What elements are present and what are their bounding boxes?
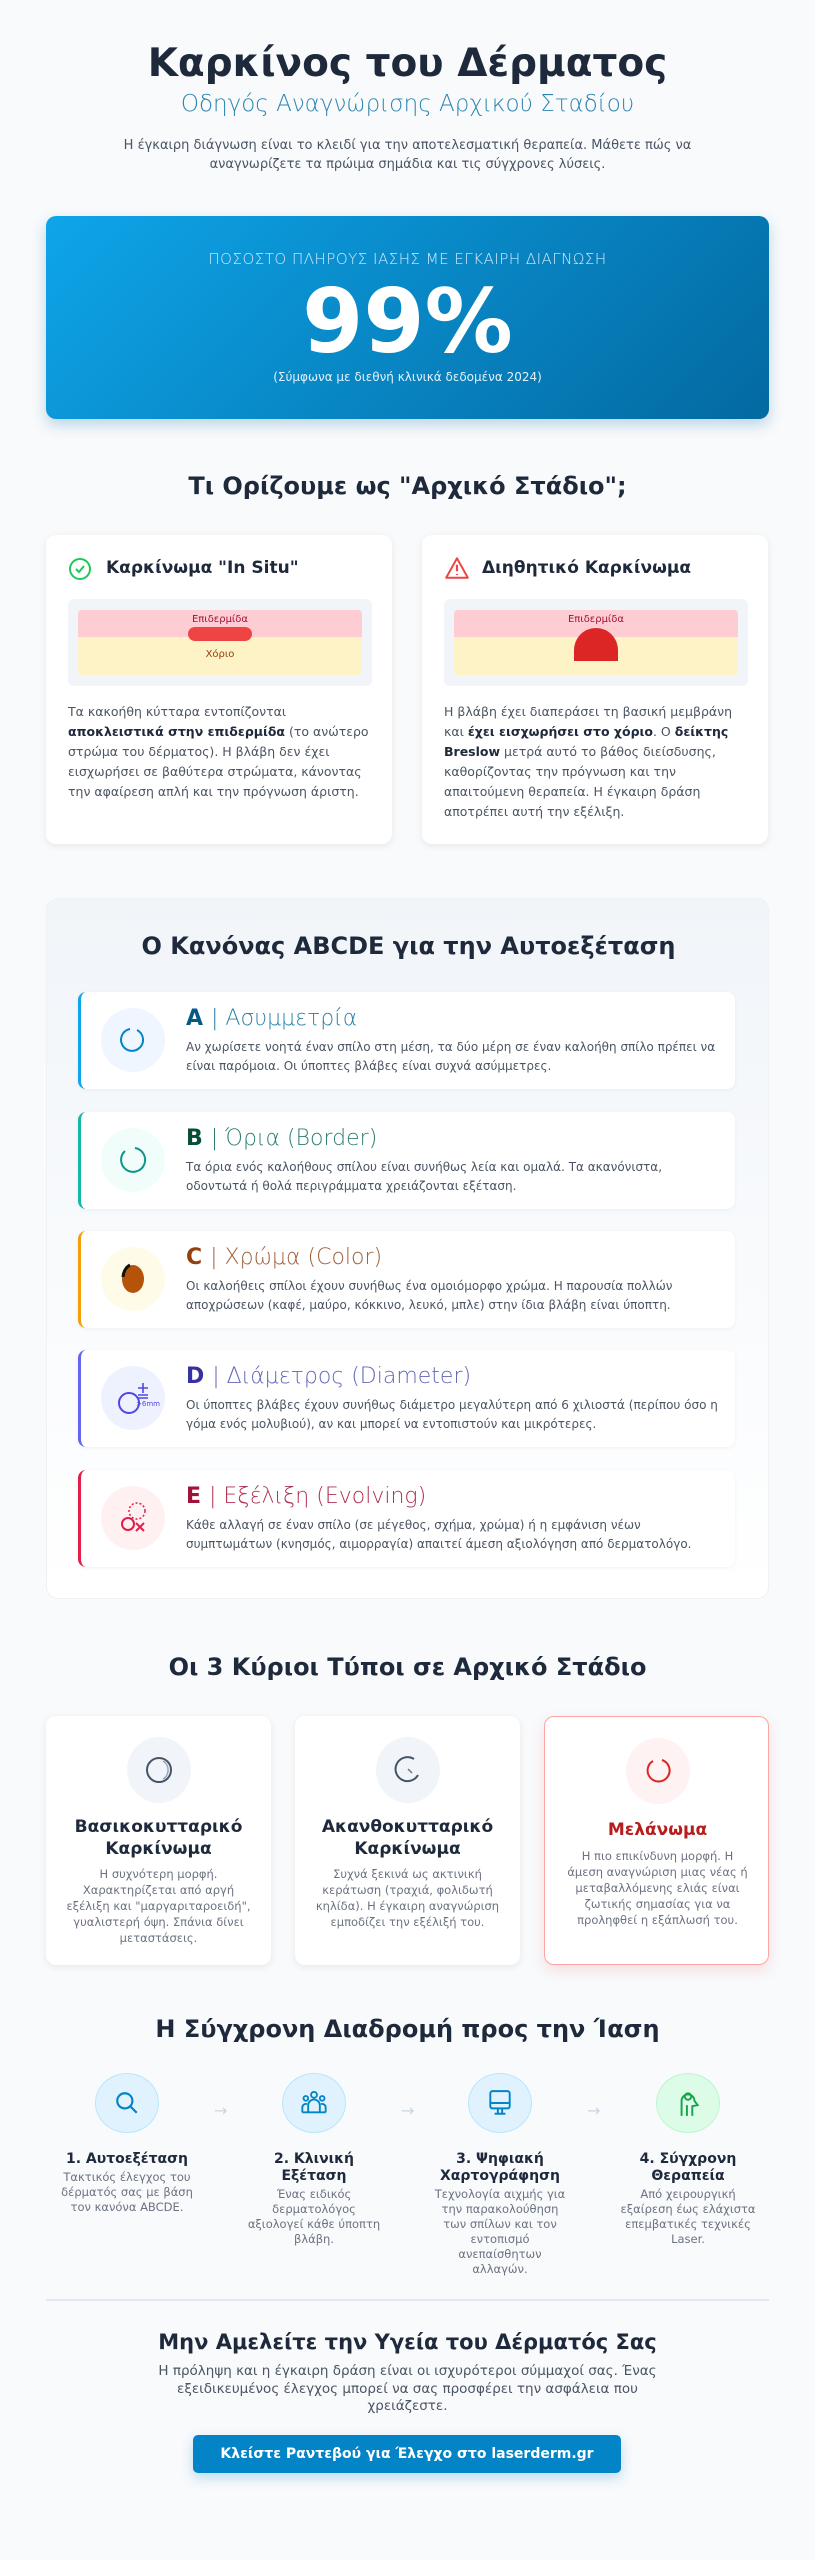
item C: Οι καλοήθεις σπίλοι έχουν συνήθως ένα ομοιόμορφο χρώμα. Η παρουσία πολλών αποχρώσεων (καφέ, μαύρο, κόκκινο, λευκό, μπλε) στην ίδια βλάβη είναι ύποπτη. bbox=[186, 1279, 672, 1312]
item D: Οι ύποπτες βλάβες έχουν συνήθως διάμετρο μεγαλύτερη από 6 χιλιοστά (περίπου όσο η γόμα ενός μολυβιού), αν και μπορεί να εντοπιστούν και μικρότερες. bbox=[186, 1398, 718, 1431]
step 2: Ένας ειδικός δερματολόγος αξιολογεί κάθε ύποπτη βλάβη. bbox=[248, 2187, 380, 2246]
item C: C | Χρώμα (Color) bbox=[186, 1245, 382, 1270]
item A: Αν χωρίσετε νοητά έναν σπίλο στη μέση, τα δύο μέρη σε έναν καλοήθη σπίλο πρέπει να είναι παρόμοια. Οι ύποπτες βλάβες είναι συχνά ασύμμετρες. bbox=[186, 1040, 715, 1073]
item B: B | Όρια (Border) bbox=[186, 1126, 377, 1151]
diagram: in situ: Επιδερμίδα bbox=[192, 614, 248, 625]
step 3: Τεχνολογία αιχμής για την παρακολούθηση των σπίλων και τον εντοπισμό ανεπαίσθητων αλλαγών. bbox=[435, 2187, 565, 2276]
item D: D | Διάμετρος (Diameter) bbox=[186, 1364, 471, 1389]
item E: Κάθε αλλαγή σε έναν σπίλο (σε μέγεθος, σχήμα, χρώμα) ή η εμφάνιση νέων συμπτωμάτων (κνησμός, αιμορραγία) απαιτεί άμεση αξιολόγηση από δερματολόγο. bbox=[186, 1518, 691, 1551]
icon D: >6mm bbox=[136, 1400, 160, 1408]
icon: monitor bbox=[468, 2073, 532, 2133]
card: basal cell: Η συχνότερη μορφή. Χαρακτηρίζεται από αργή εξέλιξη και "μαργαριταροειδή", γυαλιστερή όψη. Σπάνια δίνει μεταστάσεις. bbox=[66, 1867, 251, 1945]
step 4: 4. Σύγχρονη Θεραπεία bbox=[640, 2151, 736, 2184]
card: squamous bbox=[295, 1716, 520, 1965]
card text: Τα κακοήθη κύτταρα εντοπίζονται αποκλειστικά στην επιδερμίδα (το ανώτερο στρώμα του δέρματος). Η βλάβη δεν έχει εισχωρήσει σε βαθύτερα στρώματα, κάνοντας την αφαίρεση απλή και την πρόγνωση άριστη. bbox=[68, 704, 369, 799]
icon E bbox=[101, 1486, 165, 1550]
icon D bbox=[101, 1366, 165, 1430]
title: Καρκίνος του Δέρματος bbox=[148, 41, 667, 86]
intro text: Η έγκαιρη διάγνωση είναι το κλειδί για την αποτελεσματική θεραπεία. Μάθετε πώς να αναγνωρίζετε τα πρώιμα σημάδια και τις σύγχρονες λύσεις. bbox=[124, 138, 691, 172]
icon: melanoma bbox=[626, 1738, 690, 1804]
subtitle: Οδηγός Αναγνώρισης Αρχικού Σταδίου bbox=[181, 91, 634, 117]
step 2 bbox=[248, 2073, 380, 2246]
step 1: Τακτικός έλεγχος του δέρματός σας με βάση τον κανόνα ABCDE. bbox=[61, 2170, 193, 2214]
heading: 3 types: Οι 3 Κύριοι Τύποι σε Αρχικό Στάδιο bbox=[169, 1653, 646, 1681]
diagram: invasive bbox=[444, 599, 748, 686]
item E bbox=[78, 1470, 735, 1567]
arrow: → bbox=[401, 2101, 414, 2120]
CTA button bbox=[193, 2435, 621, 2473]
card: melanoma bbox=[544, 1716, 769, 1965]
card: melanoma: Η πιο επικίνδυνη μορφή. Η άμεση αναγνώριση μιας νέας ή μεταβαλλόμενης ελιάς είναι ζωτικής σημασίας για να προληφθεί η εξάπλωσή του. bbox=[567, 1849, 748, 1927]
card title: Διηθητικό Καρκίνωμα bbox=[482, 558, 691, 578]
diagram: in situ bbox=[68, 599, 372, 686]
diagram: in situ: Χόριο bbox=[206, 649, 234, 660]
item D bbox=[78, 1350, 735, 1447]
item C bbox=[78, 1231, 735, 1328]
item B bbox=[78, 1112, 735, 1209]
step 1: 1. Αυτοεξέταση bbox=[66, 2151, 188, 2167]
CTA button: Κλείστε Ραντεβού για Έλεγχο στο laserderm.gr bbox=[220, 2446, 594, 2462]
step 4: Από χειρουργική εξαίρεση έως ελάχιστα επεμβατικές τεχνικές Laser. bbox=[620, 2187, 756, 2246]
icon: search bbox=[95, 2073, 159, 2133]
icon: basal bbox=[127, 1737, 191, 1803]
step 2: 2. Κλινική Εξέταση bbox=[274, 2151, 354, 2184]
card: squamous: Συχνά ξεκινά ως ακτινική κεράτωση (τραχιά, φολιδωτή κηλίδα). Η έγκαιρη αναγνώριση εμποδίζει την εξέλιξή του. bbox=[316, 1867, 499, 1929]
item A: A | Ασυμμετρία bbox=[186, 1006, 357, 1031]
item A bbox=[78, 992, 735, 1089]
item E: E | Εξέλιξη (Evolving) bbox=[186, 1484, 426, 1509]
card text: Η βλάβη έχει διαπεράσει τη βασική μεμβράνη και έχει εισχωρήσει στο χόριο. Ο δείκτης Breslow μετρά αυτό το βάθος διείσδυσης, καθορίζοντας την πρόγνωση και την απαιτούμενη θεραπεία. Η έγκαιρη δράση αποτρέπει αυτή την εξέλιξη. bbox=[444, 704, 732, 819]
panel: invasive bbox=[422, 535, 768, 844]
icon C bbox=[101, 1247, 165, 1311]
diagram: invasive: Επιδερμίδα bbox=[568, 614, 624, 625]
heading: early stage: Τι Ορίζουμε ως "Αρχικό Στάδιο"; bbox=[188, 472, 627, 500]
icon: treatment bbox=[656, 2073, 720, 2133]
icon: squamous bbox=[376, 1737, 440, 1803]
arrow: → bbox=[214, 2101, 227, 2120]
card: basal cell: Βασικοκυτταρικό Καρκίνωμα bbox=[75, 1817, 242, 1859]
icon: check bbox=[69, 558, 91, 580]
CTA text: Η πρόληψη και η έγκαιρη δράση είναι οι ισχυρότεροι σύμμαχοί σας. Ένας εξειδικευμένος έλεγχος μπορεί να σας προσφέρει την ασφάλεια που χρειάζεστε. bbox=[158, 2363, 657, 2414]
card: squamous: Ακανθοκυτταρικό Καρκίνωμα bbox=[322, 1817, 493, 1859]
card: basal cell bbox=[46, 1716, 271, 1965]
card: melanoma: Μελάνωμα bbox=[608, 1820, 707, 1840]
stat label: ΠΟΣΟΣΤΟ ΠΛΗΡΟΥΣ ΙΑΣΗΣ ΜΕ ΕΓΚΑΙΡΗ ΔΙΑΓΝΩΣΗ bbox=[208, 250, 607, 268]
icon B bbox=[101, 1128, 165, 1192]
stat note: (Σύμφωνα με διεθνή κλινικά δεδομένα 2024) bbox=[273, 370, 542, 384]
stat panel: 99% bbox=[46, 216, 769, 419]
step 4 bbox=[620, 2073, 756, 2246]
step 3 bbox=[434, 2073, 565, 2276]
icon A bbox=[101, 1008, 165, 1072]
heading: ABCDE: Ο Κανόνας ABCDE για την Αυτοεξέταση bbox=[142, 932, 675, 960]
stat number: 99% bbox=[302, 270, 513, 373]
heading: pathway: Η Σύγχρονη Διαδρομή προς την Ίαση bbox=[155, 2015, 660, 2043]
icon: warning bbox=[445, 557, 469, 579]
icon: people bbox=[282, 2073, 346, 2133]
step 3: 3. Ψηφιακή Χαρτογράφηση bbox=[440, 2151, 560, 2184]
panel: in situ bbox=[46, 535, 392, 844]
CTA heading: Μην Αμελείτε την Υγεία του Δέρματός Σας bbox=[158, 2330, 657, 2354]
card title: Καρκίνωμα "In Situ" bbox=[106, 558, 299, 578]
arrow: → bbox=[587, 2101, 600, 2120]
panel: ABCDE bbox=[46, 898, 769, 1599]
item B: Τα όρια ενός καλοήθους σπίλου είναι συνήθως λεία και ομαλά. Τα ακανόνιστα, οδοντωτά ή θολά περιγράμματα χρειάζονται εξέταση. bbox=[186, 1160, 662, 1193]
step 1 bbox=[61, 2073, 193, 2214]
